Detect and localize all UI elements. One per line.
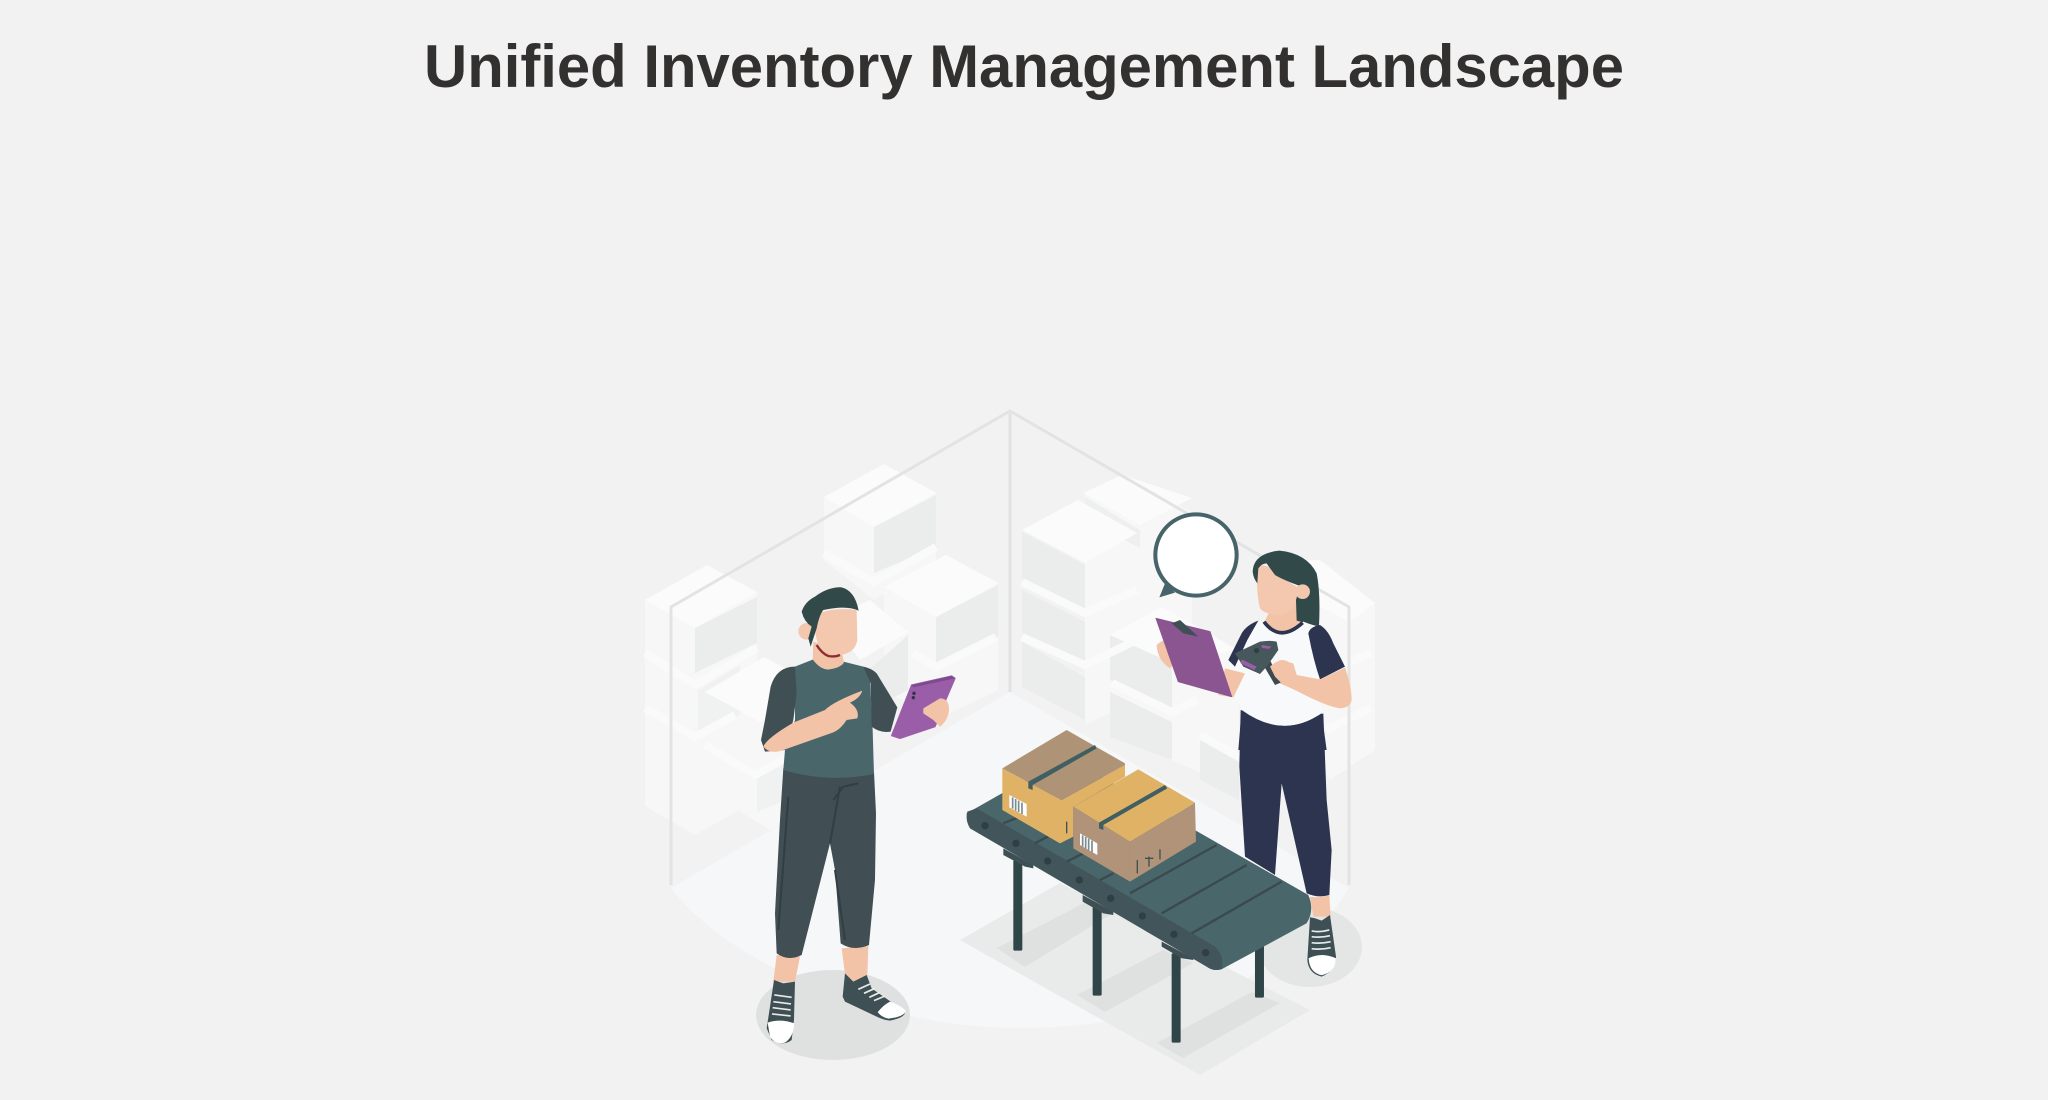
back parcel [1002, 730, 1125, 843]
man upper body [761, 587, 955, 778]
conveyor legs [1013, 860, 1264, 1043]
tablet [892, 676, 955, 738]
background shelves and boxes [645, 464, 1375, 835]
speech bubble [1155, 514, 1237, 597]
man legs and shoes [767, 768, 906, 1043]
woman legs and shoe [1239, 710, 1336, 977]
woman with clipboard and scanner [1156, 551, 1352, 977]
floor shadows [756, 883, 1362, 1075]
barcode scanner [1235, 641, 1281, 685]
clipboard [1156, 618, 1232, 697]
title: Unified Inventory Management Landscape [424, 33, 1624, 100]
woman upper body [1156, 551, 1352, 750]
front parcel [1073, 769, 1196, 882]
man with tablet [761, 587, 955, 1043]
warehouse illustration [645, 411, 1375, 1075]
warehouse floor [671, 692, 1349, 1028]
shelving frame lines [671, 411, 1349, 885]
belt [967, 757, 1311, 970]
conveyor belt with parcels [967, 730, 1311, 1043]
